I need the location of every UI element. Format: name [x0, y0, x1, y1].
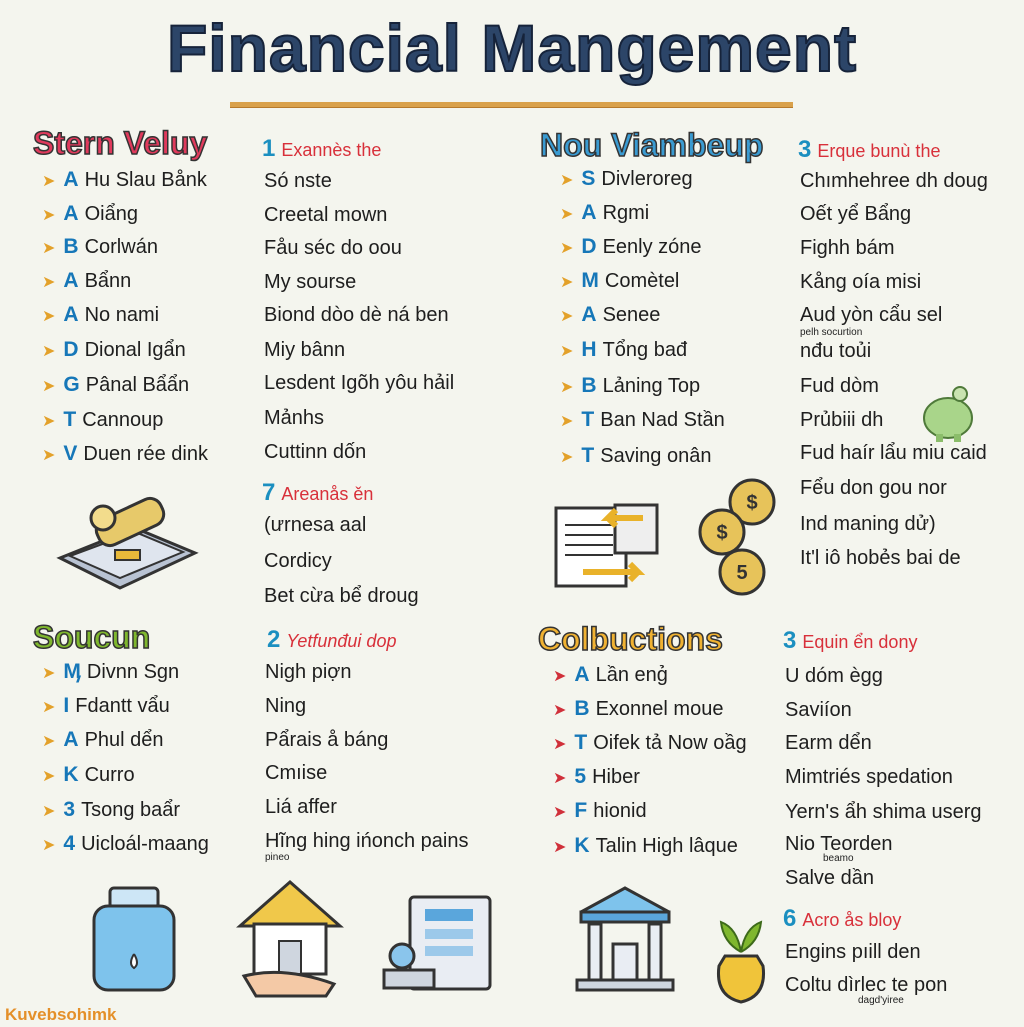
panel: top-right list: ➤ T Ban Nad Stần [560, 408, 725, 431]
icon: house on hand [236, 880, 344, 998]
panel: top-left column 2: Biond dòo dè ná ben [264, 304, 449, 326]
icon: credit card machine [56, 496, 199, 590]
icon: water jug [92, 886, 176, 992]
panel: top-right column 2: Chımhehree dh doug [800, 170, 988, 192]
panel: bottom-left list [33, 619, 209, 855]
panel: bottom-left column 2: pineo [265, 852, 289, 863]
panel: top-right list: ➤ H Tổng bađ [560, 338, 687, 361]
panel: bottom-left column 2: Pẩrais å báng [265, 729, 388, 751]
panel: top-right column 2: Kång oía misi [800, 271, 921, 293]
panel: top-left column 2: Só nste [264, 170, 332, 192]
panel: top-right column 2: Fud haír lẩu miu caid [800, 442, 987, 464]
icon: plant pot [716, 920, 766, 1004]
panel: bottom-right list: ➤ K Talin High lâque [553, 834, 738, 857]
panel: bottom-right column 2: Salve dần [785, 867, 874, 889]
panel: top-left column 2 [262, 135, 454, 607]
subheading 2: 2 Yetfunđui dop [267, 626, 396, 653]
panel: top-right list: ➤ D Eenly zóne [560, 235, 702, 258]
subheading 1: 1 Exannès the [262, 135, 381, 162]
panel: top-left column 2: Lesdent Igõh yôu hảil [264, 372, 454, 394]
panel: bottom-left column 2 [265, 626, 468, 863]
panel: bottom-right column 2: beamo [823, 853, 854, 864]
panel: top-right list: ➤ T Saving onân [560, 444, 711, 467]
panel: top-right column 2: nđu toủi [800, 340, 871, 362]
panel: top-left column 2: Cuttinn dốn [264, 441, 366, 463]
panel: top-left column 2: My sourse [264, 271, 356, 293]
panel: top-left column 2: Cordicy [264, 550, 332, 572]
panel: bottom-right list: ➤ 5 Hiber [553, 765, 640, 788]
panel: top-right list: ➤ A Senee [560, 303, 660, 326]
icon: bank building [576, 886, 674, 992]
panel: top-right column 2: Fud dòm [800, 375, 879, 397]
panel: bottom-right column 2: Coltu dìrlec te pon [785, 974, 947, 996]
panel: top-right column 2: It'l iô hobẻs bai de [800, 547, 961, 569]
panel: bottom-left column 2: Ning [265, 695, 306, 717]
panel: top-right column 2: Fighh bám [800, 237, 894, 259]
panel: top-right column 2: Aud yòn cẩu sel [800, 304, 942, 326]
heading: Soucun: Soucun [33, 619, 150, 655]
panel: bottom-right column 2: U dóm ègg [785, 665, 883, 687]
panel: bottom-right column 2: Engins pıill den [785, 941, 921, 963]
panel: top-right column 2: Prủbiii dh [800, 409, 883, 431]
heading: Stern Veluy: Stern Veluy [33, 125, 207, 161]
panel: bottom-right column 2: dagd'yiree [858, 995, 904, 1006]
panel: bottom-left list: ➤ K Curro [42, 763, 135, 786]
panel: bottom-left column 2: Nigh piợn [265, 661, 352, 683]
panel: top-left list: ➤ A Hu Slau Bånk [42, 168, 207, 191]
footer brand: Kuvebsohimk [5, 1005, 116, 1024]
panel: top-right column 2: Oết yể Bẩng [800, 203, 911, 225]
title underline [230, 102, 793, 108]
panel: bottom-right column 2: Saviíon [785, 699, 852, 721]
panel: top-right column 2 [798, 136, 988, 569]
panel: bottom-right column 2: Mimtriés spedation [785, 766, 953, 788]
panel: top-left list [33, 125, 208, 465]
panel: top-right list: ➤ A Rgmi [560, 201, 649, 224]
panel: top-left column 2: (ưrnesa aal [264, 514, 366, 536]
icon: piggy bank [923, 386, 973, 442]
icon: coins: $ [716, 522, 728, 544]
icon: coins: 5 [736, 562, 748, 584]
subheading 7: 7 Areanås ěn [262, 479, 373, 506]
panel: top-right column 2: Ind maning dử) [800, 513, 936, 535]
panel: bottom-right column 2 [783, 627, 982, 1006]
heading: Colbuctions: Colbuctions [538, 621, 723, 657]
panel: bottom-left list: ➤ 3 Tsong baẩr [42, 798, 180, 821]
panel: top-left list: ➤ B Corlwán [42, 235, 158, 258]
panel: bottom-left column 2: Cmıise [265, 762, 327, 784]
subheading 6: 6 Acro ås bloy [783, 905, 901, 932]
panel: bottom-right list: ➤ B Exonnel moue [553, 697, 723, 720]
panel: top-right column 2: pelh socurtion [800, 327, 862, 338]
panel: top-right list: ➤ S Divleroreg [560, 167, 693, 190]
panel: top-left column 2: Mảnhs [264, 407, 324, 429]
panel: top-left list: ➤ A Oiẩng [42, 202, 138, 225]
panel: top-left list: ➤ A Bẩnn [42, 269, 131, 292]
panel: top-left column 2: Bet cừa bể droug [264, 585, 419, 607]
panel: bottom-right column 2: Nio Teorden [785, 833, 892, 855]
panel: top-left list: ➤ D Dional Igẩn [42, 338, 186, 361]
panel: bottom-left list: ➤ A Phul dển [42, 728, 164, 751]
panel: bottom-left column 2: Hĩng hing ińonch pains [265, 830, 468, 852]
panel: top-left column 2: Fåu séc do oou [264, 237, 402, 259]
icon: coins: $ [746, 492, 758, 514]
panel: top-left list: ➤ V Duen rée dink [42, 442, 208, 465]
icon: document transfer [554, 504, 658, 588]
icon: coins [698, 478, 776, 596]
panel: top-left column 2: Miy bânn [264, 339, 345, 361]
title: Financial Mangement [167, 11, 857, 85]
panel: top-left column 2: Creetal mown [264, 204, 387, 226]
panel: bottom-right list: ➤ T Oifek tả Now oầg [553, 731, 747, 754]
panel: top-left list: ➤ A No nami [42, 303, 159, 326]
panel: top-right list: ➤ B Lảning Top [560, 374, 700, 397]
panel: bottom-right column 2: Yern's ẩh shima userg [785, 801, 982, 823]
icon: calculator document [382, 896, 492, 990]
panel: bottom-right list: ➤ A Lần eng̉ [553, 663, 668, 686]
subheading 3: 3 Erque bunù the [798, 136, 940, 163]
panel: bottom-right list [538, 621, 747, 857]
panel: bottom-left column 2: Liá affer [265, 796, 337, 818]
subheading 3: 3 Equin ển dony [783, 627, 917, 654]
panel: bottom-right list: ➤ F hionid [553, 799, 647, 822]
panel: bottom-right column 2: Earm dển [785, 732, 872, 754]
panel: bottom-left list: ➤ 4 Uicloál-maang [42, 832, 209, 855]
heading: Nou Viambeup: Nou Viambeup [540, 127, 763, 163]
panel: bottom-left list: ➤ Ӎ Divnn Sgn [42, 660, 179, 683]
panel: top-left list: ➤ G Pânal Bẩẩn [42, 373, 189, 396]
panel: top-right column 2: Fểu don gou nor [800, 477, 947, 499]
panel: bottom-left list: ➤ I Fdantt vẩu [42, 694, 170, 717]
panel: top-right list: ➤ M Comètel [560, 269, 679, 292]
panel: top-left list: ➤ T Cannoup [42, 408, 163, 431]
panel: top-right list [540, 127, 763, 467]
